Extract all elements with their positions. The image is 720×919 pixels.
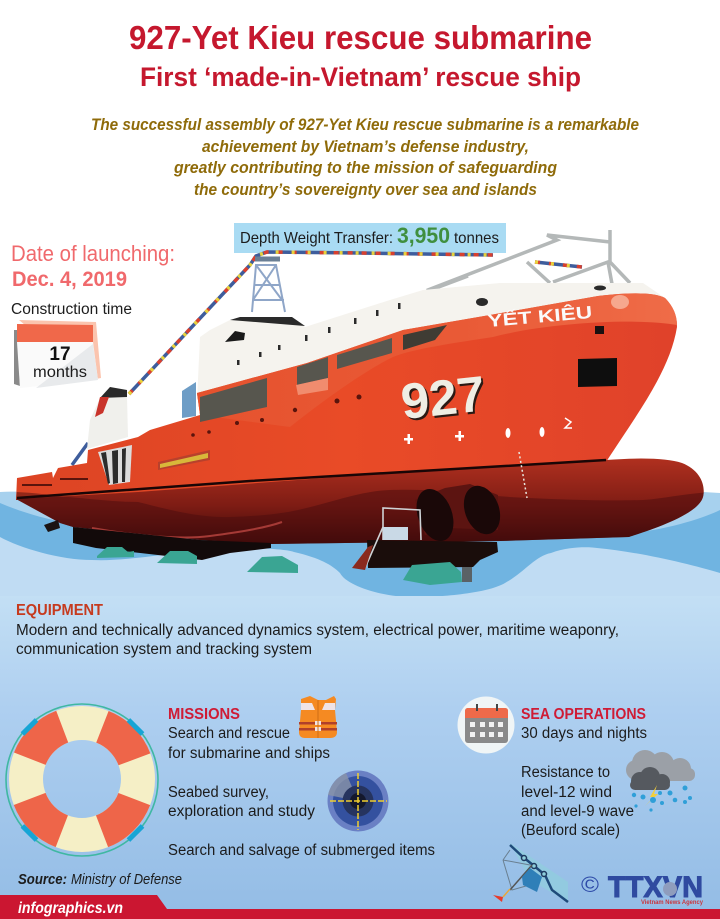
ship name: YẾT KIÊU [487,301,593,331]
side windows [200,325,617,422]
sea operations: Resistance to [521,764,610,781]
depth weight badge: 3,950 [397,223,450,248]
equipment: communication system and tracking system [16,641,312,658]
missions [168,706,435,859]
missions: MISSIONS [168,706,240,723]
footer band [0,895,720,919]
bridge windows [230,317,305,326]
sea operations: and level-9 wave [521,803,634,820]
icon: sonar [328,770,388,832]
bow glare [611,295,629,309]
source [18,872,182,888]
depth weight badge: Depth Weight Transfer: [240,230,393,247]
calendar icon [14,320,101,388]
rudder [44,520,60,532]
draft marks [519,452,527,498]
icon: storm cloud [626,750,695,812]
title: First ‘made-in-Vietnam’ rescue ship [140,62,581,92]
sea background waves [0,490,720,919]
lower hull [16,459,704,544]
sea operations: SEA OPERATIONS [521,706,646,723]
vents under window [296,378,328,395]
launch date: Dec. 4, 2019 [12,268,127,291]
portholes [22,394,362,486]
construction time: Construction time [11,301,132,318]
calendar icon: 17 [49,344,71,365]
teal blocks [97,547,472,585]
icon: rescue glider [493,843,568,902]
equipment: EQUIPMENT [16,602,103,619]
hull number 927: 927 [398,365,488,430]
calendar icon: months [33,364,87,381]
sea operations: (Beuford scale) [521,822,620,839]
bow lighter panel [197,293,677,427]
intro text: the country’s sovereignty over sea and islands [194,180,537,199]
ship illustration [0,230,720,585]
missions: Search and salvage of submerged items [168,842,435,859]
copyright logo: © [581,872,599,897]
missions: Seabed survey, [168,784,269,801]
white superstructure [197,283,668,400]
depth weight badge: tonnes [454,230,499,247]
icon: lifebuoy [6,704,158,856]
title: 927-Yet Kieu rescue submarine [129,19,592,56]
equipment [16,602,619,658]
sea operations: 30 days and nights [521,725,647,742]
launch date: Date of launching: [11,241,175,266]
support stand [367,540,498,568]
hull number shadow: 927 [400,367,490,432]
keel blocks [73,527,271,560]
intro text: achievement by Vietnam’s defense industry, [202,137,529,156]
intro text: The successful assembly of 927-Yet Kieu rescue submarine is a remarkable [91,115,639,134]
sea operations [521,706,647,839]
intro text [91,115,639,199]
nameplate [158,450,210,470]
sea operations: level-12 wind [521,784,612,801]
upper hull [16,293,677,500]
equipment: Modern and technically advanced dynamics system, electrical power, maritime weaponry, [16,622,619,639]
construction time [11,301,132,388]
white hull marks [404,418,572,444]
intro text: greatly contributing to the mission of safeguarding [173,158,558,177]
missions: for submarine and ships [168,745,330,762]
source: Source: [18,872,67,888]
icon: calendar [458,696,514,754]
signal flags line [72,252,582,465]
icon: life jacket [299,696,337,738]
deck marks [237,286,606,365]
side gangway box [182,382,196,418]
source: Ministry of Defense [71,872,182,888]
title [129,19,592,92]
depth weight badge [234,223,506,253]
waterline band over hull [16,490,704,544]
footer band: infographics.vn [18,900,123,917]
bilge keel [92,522,282,537]
boot line [17,460,606,498]
copyright logo: TTXVN [608,871,703,904]
mast [252,259,285,312]
bow railing [428,230,630,297]
access stairs [365,508,421,568]
bow thrusters [410,481,507,546]
stern funnel block [87,397,128,449]
missions: exploration and study [168,803,315,820]
hatch [225,331,245,342]
copyright logo: Vietnam News Agency [641,899,703,906]
stern opening [98,445,132,485]
launch date [11,241,175,291]
missions: Search and rescue [168,725,290,742]
